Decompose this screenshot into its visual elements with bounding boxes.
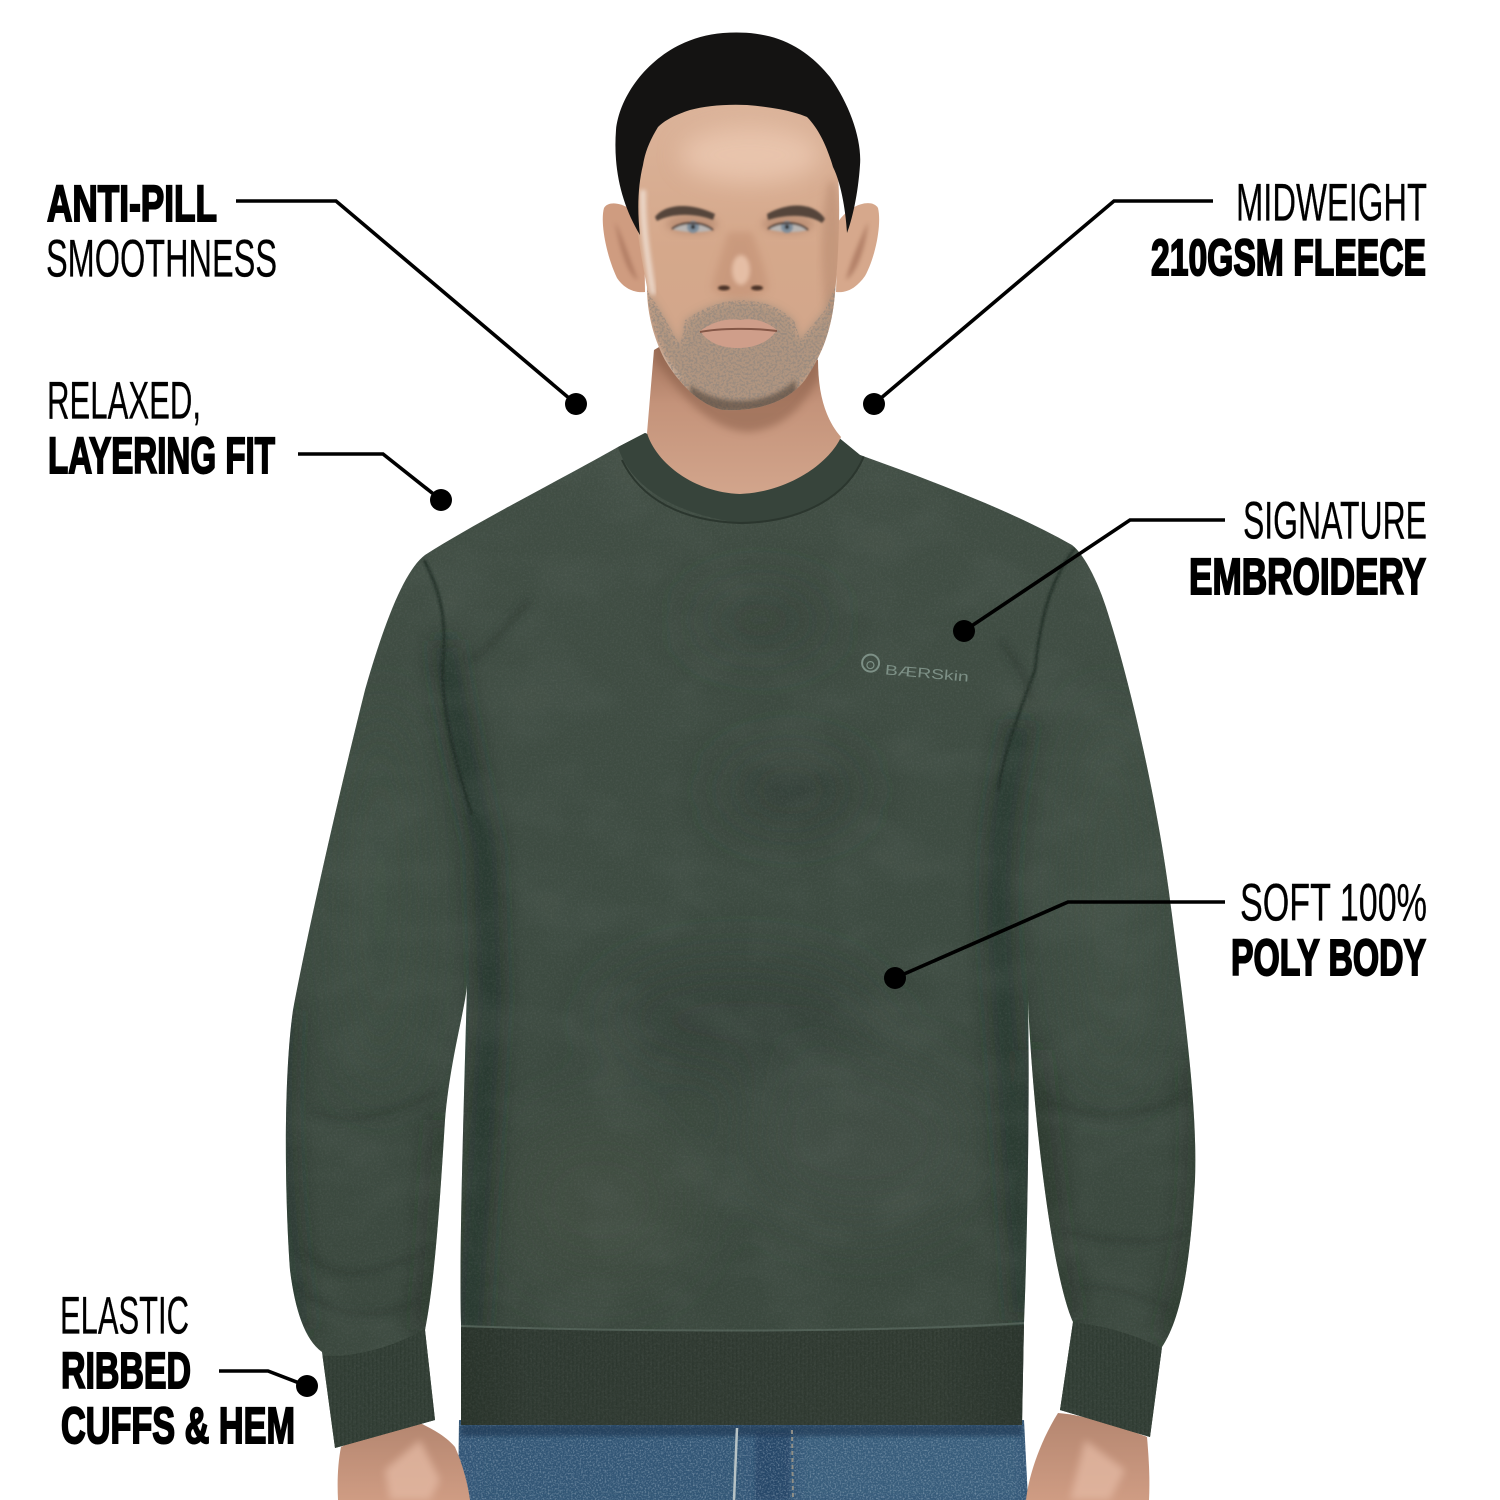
chin shadow: [690, 380, 800, 412]
armhole seams: [424, 548, 1075, 815]
jeans: [455, 1420, 1030, 1500]
leader line: [874, 201, 1213, 404]
beard stubble: [647, 285, 836, 410]
photo: man wearing green fleece crewneck: [270, 33, 1210, 1500]
label text: [1189, 492, 1427, 605]
label text: [47, 372, 275, 484]
pale jaw highlight: [658, 343, 680, 379]
leader line: [298, 454, 441, 500]
leader line: [895, 902, 1225, 978]
dot: [863, 393, 885, 415]
fleece grain: [270, 420, 1210, 1460]
sweater: [270, 420, 1210, 1460]
dot: [884, 967, 906, 989]
collar band: [618, 430, 864, 523]
cuff ribbing: [320, 1322, 1164, 1452]
dot: [953, 620, 975, 642]
label text: CUFFS & HEM: [61, 1397, 295, 1454]
label text: LAYERING FIT: [48, 427, 275, 484]
fleece dark grain: [444, 482, 936, 703]
left hand: [338, 1422, 470, 1500]
face: [638, 104, 840, 410]
hem band: [458, 1325, 1026, 1430]
hair: [615, 33, 860, 235]
label text: [1151, 174, 1427, 286]
callout: soft 100% poly body: [884, 874, 1427, 989]
label text: ANTI-PILL: [47, 175, 217, 232]
leader line: [964, 520, 1225, 631]
left eye: [672, 221, 713, 233]
dot: [565, 393, 587, 415]
nose: [712, 232, 768, 298]
logo embroidery: BÆRSkin: [884, 661, 969, 685]
leader line: [219, 1371, 307, 1386]
label text: [1231, 874, 1427, 986]
callout: elastic ribbed cuffs and hem: [60, 1286, 318, 1454]
hem ribbing: [458, 1325, 1026, 1430]
left ear: [603, 203, 645, 292]
neck: [647, 347, 841, 494]
right cuff: [1056, 1322, 1164, 1440]
sleeve wrinkles: [316, 1108, 1170, 1314]
mouth: [700, 319, 777, 348]
label text: SMOOTHNESS: [46, 230, 277, 288]
pale temple highlight: [643, 190, 653, 295]
right hand: [1026, 1413, 1149, 1500]
eye sockets: [666, 214, 814, 234]
label text: [60, 1286, 295, 1454]
right ear: [836, 203, 879, 292]
label text: RELAXED,: [47, 372, 201, 430]
label text: RIBBED: [61, 1342, 191, 1399]
chest folds: [470, 600, 1030, 700]
ear shading: [615, 222, 868, 280]
right eye: [768, 221, 808, 233]
dot: [430, 489, 452, 511]
beard tone: [647, 285, 836, 410]
dot: [296, 1375, 318, 1397]
leader line: [236, 201, 576, 404]
hem seam: [461, 1323, 1024, 1330]
mottled fleece: [424, 763, 1070, 1264]
label text: ELASTIC: [60, 1286, 189, 1346]
neck shadow under jaw: [655, 340, 820, 432]
sweater shading: [324, 711, 1170, 1042]
label text: [46, 175, 277, 288]
callout: signature embroidery: [953, 492, 1427, 642]
callout: anti-pill smoothness: [46, 175, 587, 415]
left cuff: [320, 1328, 438, 1452]
callout: midweight 210gsm fleece: [863, 174, 1427, 415]
logo embroidery: [861, 654, 970, 685]
cheek shading: [822, 182, 840, 315]
eyebrows: [655, 205, 825, 223]
forehead highlight: [680, 127, 820, 183]
hand highlights: [385, 1440, 1125, 1500]
callout: relaxed layering fit: [47, 372, 452, 511]
